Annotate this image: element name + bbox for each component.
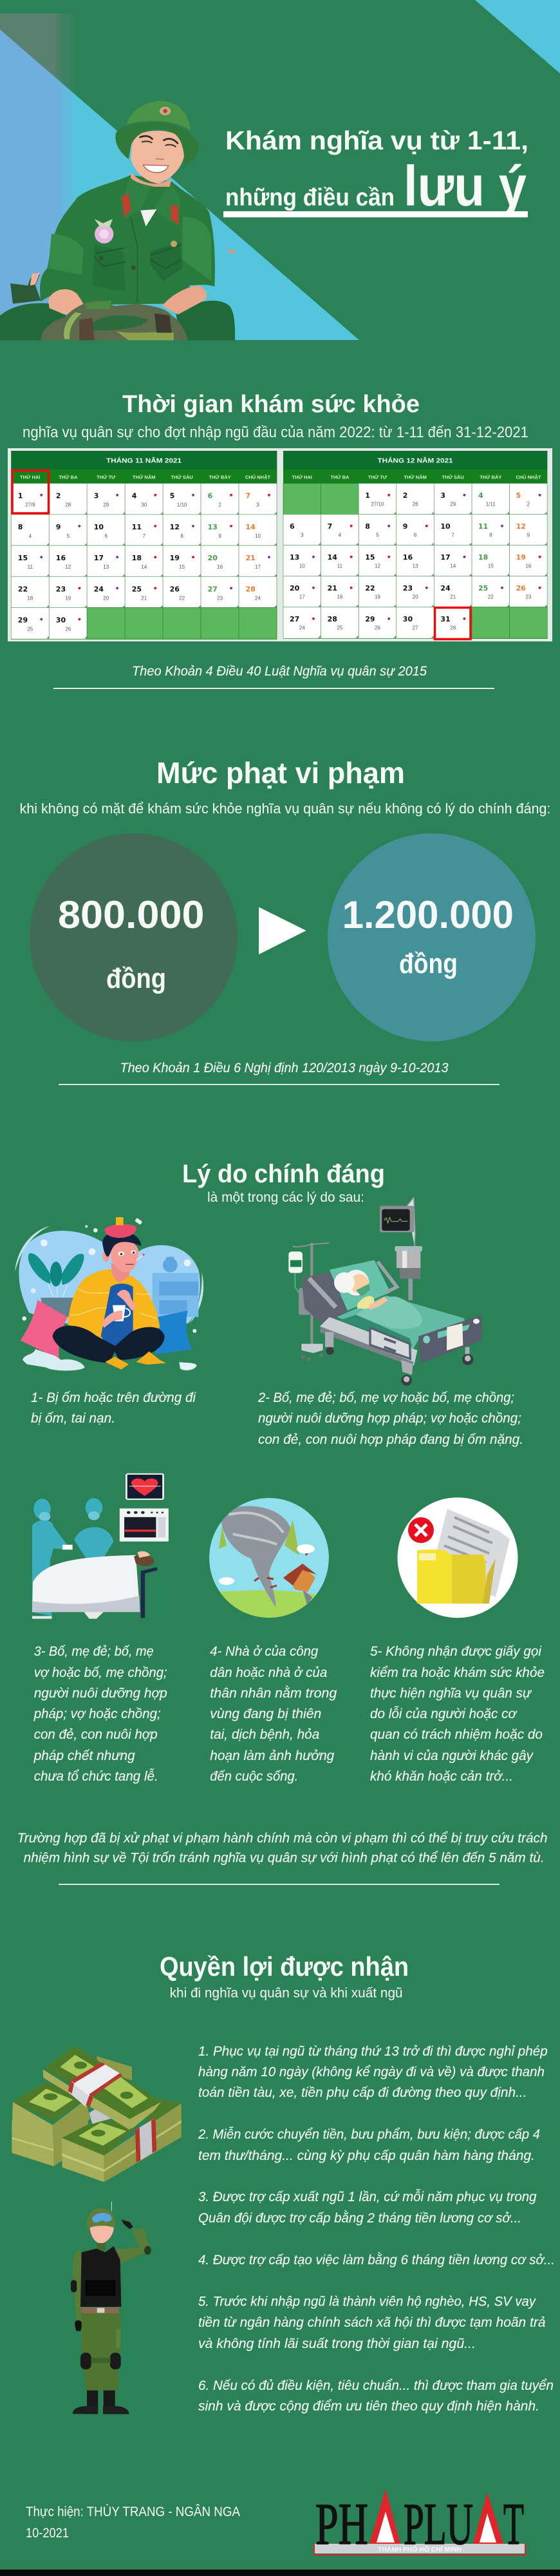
calendar: November 2021: 3	[94, 492, 98, 500]
benefit 1 text: toán tiền tàu, xe, tiền phụ cấp đi đường theo quy định...	[198, 2085, 527, 2100]
reason 4 text	[210, 1644, 337, 1784]
calendar: November 2021: 27/9	[25, 502, 35, 508]
calendar: December 2021: 2	[403, 491, 407, 500]
reason 1 text: bị ốm, tai nạn.	[31, 1411, 115, 1426]
calendar: December 2021: 5	[376, 533, 379, 538]
calendar: December 2021: 21	[328, 584, 337, 592]
calendar: November 2021: 24	[94, 585, 104, 593]
benefit 1 text: hàng năm 10 ngày (không kể ngày đi và về) và được thanh	[198, 2065, 545, 2079]
calendar: November 2021: 22	[179, 595, 185, 601]
calendar: December 2021: 22	[365, 584, 375, 592]
title: lưu ý	[404, 154, 527, 218]
calendar: December 2021: THỨ HAI	[292, 474, 312, 480]
heading: valid reasons: Lý do chính đáng	[182, 1160, 385, 1188]
calendar: December 2021: THÁNG 12 NĂM 2021	[377, 457, 453, 465]
calendar: December 2021: 26	[516, 584, 526, 592]
reason 2 text	[257, 1390, 523, 1447]
calendar: November 2021: 15	[179, 564, 185, 570]
calendar: December 2021: 6	[290, 522, 295, 531]
calendar: November 2021: 5	[67, 533, 70, 539]
calendar: November 2021: 3	[256, 502, 259, 508]
calendar: November 2021: 24	[255, 595, 261, 601]
illustration: saluting soldier	[71, 2201, 151, 2414]
calendar: December 2021: CHỦ NHẬT	[516, 474, 541, 480]
calendar: December 2021: 14	[450, 564, 456, 569]
calendar: November 2021: 18	[132, 554, 142, 562]
calendar: December 2021: 27	[413, 625, 418, 631]
calendar frame	[8, 448, 552, 641]
calendar: November 2021: 16	[56, 554, 66, 562]
reason 3 text: pháp chết nhưng	[33, 1748, 135, 1763]
calendar: December 2021: 16	[525, 564, 532, 569]
heading: penalty: Mức phạt vi phạm	[156, 756, 405, 790]
calendar: November 2021: 17	[255, 564, 261, 570]
reason 4 text: tai, dịch bệnh, hỏa	[210, 1727, 319, 1742]
calendar: December 2021: 10	[440, 522, 451, 531]
logo: Pháp Luật: PH	[315, 2491, 368, 2557]
calendar: December 2021: 30	[403, 615, 413, 623]
reason 5 text: kiểm tra hoặc khám sức khỏe	[370, 1665, 545, 1680]
calendar: November 2021: 29	[18, 616, 28, 625]
calendar: December 2021: 26	[375, 625, 380, 631]
subheading: valid reasons: là một trong các lý do sau:	[207, 1190, 364, 1205]
calendar: November 2021: 21	[246, 554, 256, 562]
calendar: November 2021: 21	[141, 595, 147, 601]
calendar: November 2021: 5	[170, 492, 174, 500]
calendar: December 2021: 23	[525, 594, 532, 600]
reason 3 text: chưa tổ chức tang lễ.	[34, 1769, 158, 1784]
calendar: November 2021: 29	[103, 502, 109, 508]
calendar: November 2021: 11	[132, 523, 142, 531]
title: Khám nghĩa vụ từ 1-11,	[225, 126, 528, 155]
reason 5 text: do lỗi của người hoặc cơ	[370, 1707, 518, 1721]
reason 4 text: hoạn làm ảnh hưởng	[210, 1748, 335, 1763]
benefit 1 text	[198, 2044, 548, 2100]
calendar: December 2021: 3	[301, 533, 304, 538]
subheading: examination dates: nghĩa vụ quân sự cho đợt nhập ngũ đầu của năm 2022: từ 1-11 đến 31-12-2021	[23, 424, 528, 441]
calendar: November 2021: 9	[56, 523, 61, 531]
header decorative triangles	[0, 0, 560, 340]
calendar: December 2021: THỨ NĂM	[404, 474, 427, 480]
illustration: rejected documents folder	[398, 1497, 518, 1618]
calendar: December 2021: 24	[440, 584, 451, 592]
reason 5 text: hành vi của người khác gây	[370, 1748, 534, 1763]
circle: new fine	[328, 833, 536, 1041]
calendar: November 2021: 30	[56, 616, 66, 625]
logo: Pháp Luật: PLU	[404, 2491, 473, 2557]
calendar: December 2021: 19	[375, 594, 380, 600]
benefit 3 text: Quân đội được trợ cấp bằng 2 tháng tiền lương cơ sở...	[198, 2211, 521, 2226]
calendar: December 2021: THỨ BA	[330, 474, 350, 480]
calendar: November 2021: THỨ HAI	[20, 474, 40, 480]
calendar: December 2021: 17	[440, 553, 451, 562]
calendar: December 2021: 19	[516, 553, 526, 562]
calendar: December 2021: 9	[403, 522, 407, 531]
calendar: December 2021: 11	[478, 522, 488, 531]
calendar: November 2021: THỨ BẢY	[209, 474, 231, 480]
heading: examination time: Thời gian khám sức khỏe	[122, 391, 420, 418]
reason 1 text	[31, 1390, 196, 1426]
calendar: December 2021: 13	[290, 553, 299, 562]
reason 4 text: thân nhân nằm trong	[210, 1686, 337, 1701]
reason 2 text: người nuôi dưỡng hợp pháp; vợ hoặc chồng;	[258, 1411, 521, 1426]
calendar: November 2021: 16	[217, 564, 223, 570]
criminal liability note: nhiệm hình sự về Tội trốn tránh nghĩa vụ quân sự với hình phạt có thể lên đến 5 năm tù.	[24, 1851, 545, 1865]
calendar: November 2021: 10	[255, 533, 261, 539]
circle: old fine: 800.000	[58, 893, 205, 936]
reason 5 text: 5- Không nhận được giấy gọi	[370, 1644, 542, 1659]
calendar: November 2021: 23	[56, 585, 66, 593]
illustration: surgery team	[32, 1474, 169, 1619]
circle: old fine	[30, 833, 238, 1041]
calendar: December 2021: 15	[365, 553, 375, 562]
calendar: December 2021: 28	[328, 615, 337, 623]
title: những điều cần	[225, 184, 395, 211]
calendar: December 2021: 28	[450, 625, 456, 631]
credits: 10-2021	[26, 2526, 69, 2541]
calendar: November 2021: 14	[246, 523, 256, 531]
reason 4 text: vùng đang bị thiên	[210, 1707, 321, 1721]
calendar: December 2021: 4	[339, 533, 342, 538]
calendar: November 2021: 11	[28, 564, 33, 570]
benefit 2 text	[198, 2127, 540, 2163]
calendar: December 2021: 20	[290, 584, 300, 592]
benefit 4 text: 4. Được trợ cấp tạo việc làm bằng 6 tháng tiền lương cơ sở...	[198, 2253, 555, 2268]
reason 3 text: vợ hoặc bố, mẹ chồng;	[34, 1665, 167, 1680]
calendar: November 2021: 9	[218, 533, 221, 539]
bottom edge band	[0, 2570, 560, 2576]
calendar: November 2021: THÁNG 11 NĂM 2021	[106, 457, 182, 465]
benefit 3 text	[198, 2190, 537, 2226]
title	[223, 126, 528, 218]
benefit 5 text: 5. Trước khi nhập ngũ là thành viên hộ nghèo, HS, SV vay	[198, 2294, 536, 2309]
calendar: December 2021: 15	[488, 564, 494, 569]
highlight: last exam day	[435, 608, 471, 639]
calendar: December 2021: THỨ TƯ	[368, 474, 387, 480]
circle: new fine: đồng	[399, 948, 458, 980]
calendar: November 2021: 7	[246, 492, 250, 500]
illustration: smiling young soldier	[0, 101, 236, 340]
subheading: benefits: khi đi nghĩa vụ quân sự và khi xuất ngũ	[170, 1986, 403, 2001]
calendar: December 2021: 28	[413, 502, 418, 507]
calendar: November 2021: 1/10	[177, 502, 187, 508]
logo: Pháp Luật: THÀNH PHỐ HỒ CHÍ MINH	[378, 2544, 462, 2553]
calendar: November 2021: 12	[65, 564, 71, 570]
reason 2 text: 2- Bố, mẹ đẻ; bố, mẹ vợ hoặc bố, mẹ chồng;	[257, 1390, 514, 1405]
calendar: November 2021: 17	[94, 554, 104, 562]
illustration: sick man under a blanket	[15, 1217, 203, 1370]
calendar: December 2021: 6	[414, 533, 417, 538]
calendar: December 2021: 4	[478, 491, 483, 500]
calendar: December 2021: THỨ SÁU	[442, 474, 464, 480]
calendar: December 2021: THỨ BẢY	[480, 474, 501, 480]
calendar: December 2021: 20	[413, 594, 418, 600]
benefit 5 text: và không tính lãi suất trong thời gian tại ngũ...	[198, 2336, 476, 2351]
calendar: November 2021: 4	[132, 492, 137, 500]
calendar: December 2021: 25	[337, 625, 343, 631]
logo: Pháp Luật	[314, 2489, 525, 2557]
reason 3 text: pháp; vợ hoặc chồng;	[33, 1707, 161, 1721]
calendar: December 2021: 1	[365, 491, 370, 500]
reason 5 text: thực hiện nghĩa vụ quân sự	[370, 1686, 532, 1701]
calendar: November 2021: 25	[27, 626, 33, 632]
calendar: November 2021: 26	[170, 585, 180, 593]
calendar: December 2021: 29	[450, 502, 456, 507]
criminal liability note	[17, 1831, 548, 1865]
benefit 6 text	[198, 2378, 554, 2414]
reason 3 text	[33, 1644, 167, 1784]
calendar: November 2021: 2	[218, 502, 221, 508]
calendar: December 2021: 5	[516, 491, 521, 500]
reason 5 text: quan có trách nhiệm hoặc do	[370, 1727, 543, 1742]
calendar: November 2021: 15	[18, 554, 28, 562]
credits: Thực hiện: THÙY TRANG - NGÂN NGA	[26, 2505, 240, 2519]
calendar: November 2021: 22	[18, 585, 28, 593]
credits	[26, 2505, 240, 2541]
illustration: stacks of money	[12, 2046, 182, 2182]
calendar: November 2021: THỨ TƯ	[97, 474, 116, 480]
calendar: November 2021: 10	[94, 523, 104, 531]
calendar: December 2021: 8	[365, 522, 370, 531]
source note: decree: Theo Khoản 1 Điều 6 Nghị định 120/2013 ngày 9-10-2013	[120, 1061, 449, 1075]
calendar: December 2021: 27	[290, 615, 299, 623]
reason 3 text: con đẻ, con nuôi hợp	[34, 1727, 158, 1742]
calendar: December 2021: 27/10	[371, 502, 384, 507]
calendar: November 2021: 27	[208, 585, 218, 593]
calendar: November 2021: 20	[103, 595, 109, 601]
calendar: November 2021: 8	[18, 523, 23, 531]
calendar: November 2021: 4	[29, 533, 32, 539]
source note: law: Theo Khoản 4 Điều 40 Luật Nghĩa vụ quân sự 2015	[132, 664, 427, 679]
calendar: December 2021: 24	[299, 625, 305, 631]
calendar: December 2021: 29	[365, 615, 375, 623]
calendar: December 2021: 9	[527, 533, 530, 538]
heading: benefits: Quyền lợi được nhận	[160, 1951, 409, 1982]
benefit 1 text: 1. Phục vụ tại ngũ từ tháng thứ 13 trở đi thì được nghỉ phép	[198, 2044, 548, 2059]
calendar: November 2021: THỨ SÁU	[171, 474, 193, 480]
calendar: December 2021: 2	[527, 502, 530, 507]
calendar: December 2021: 17	[299, 594, 305, 600]
calendar: November 2021: 28	[246, 585, 256, 593]
calendar: November 2021: 14	[141, 564, 147, 570]
highlight: first exam day	[12, 470, 49, 513]
calendar: December 2021: 8	[489, 533, 492, 538]
calendar: November 2021: 1	[18, 492, 23, 500]
benefit 6 text: sinh và được cộng điểm ưu tiên theo quy định hiện hành.	[198, 2399, 539, 2414]
logo: Pháp Luật: T	[503, 2491, 524, 2557]
calendar: November 2021: 30	[141, 502, 147, 508]
calendar: November 2021: 6	[104, 533, 107, 539]
benefit 5 text	[198, 2294, 546, 2351]
reason 5 text: khó khăn hoặc cản trở...	[370, 1769, 513, 1784]
calendar: December 2021: 18	[337, 594, 343, 600]
calendar: December 2021: 23	[403, 584, 413, 592]
calendar: November 2021: 13	[208, 523, 218, 531]
reason 3 text: 3- Bố, mẹ đẻ; bố, mẹ	[34, 1644, 154, 1659]
benefit 5 text: tiền từ ngân hàng chính sách xã hội thì được tạm hoãn trả	[198, 2315, 546, 2330]
calendar: November 2021: 28	[65, 502, 71, 508]
circle: new fine: 1.200.000	[342, 893, 514, 936]
calendar: December 2021: 1/11	[486, 502, 496, 507]
calendar: December 2021: 22	[488, 594, 494, 600]
reason 4 text: dân hoặc nhà ở của	[210, 1665, 327, 1680]
calendar: November 2021: THỨ NĂM	[133, 474, 155, 480]
illustration: tornado hitting a house	[209, 1498, 329, 1623]
subheading: penalty condition: khi không có mặt để khám sức khỏe nghĩa vụ quân sự nếu không có lý do chính đáng:	[19, 800, 551, 817]
calendar: November 2021: 19	[65, 595, 71, 601]
benefit 3 text: 3. Được trợ cấp xuất ngũ 1 lần, cứ mỗi năm phục vụ trong	[198, 2190, 537, 2204]
benefit 2 text: tem thư/tháng... cùng kỳ phụ cấp quân hàm hàng tháng.	[198, 2148, 535, 2163]
calendar: December 2021	[283, 451, 547, 639]
reason 1 text: 1- Bị ốm hoặc trên đường đi	[31, 1390, 196, 1405]
calendar: December 2021: 3	[440, 491, 445, 500]
reason 5 text	[370, 1644, 545, 1784]
calendar: November 2021: THỨ BA	[59, 474, 78, 480]
calendar: December 2021: 11	[337, 564, 343, 569]
calendar: November 2021: 8	[180, 533, 183, 539]
calendar: December 2021: 21	[450, 594, 456, 600]
calendar: December 2021: 12	[375, 564, 380, 569]
benefit 6 text: 6. Nếu có đủ điều kiện, tiêu chuẩn... thì được tham gia tuyển	[198, 2378, 554, 2393]
calendar: December 2021: 25	[478, 584, 488, 592]
reason 4 text: đến cuộc sống.	[210, 1769, 298, 1784]
calendar: November 2021: 13	[103, 564, 109, 570]
calendar: November 2021: 18	[27, 595, 33, 601]
calendar: December 2021: 14	[328, 553, 337, 562]
reason 2 text: con đẻ, con nuôi hợp pháp đang bị ốm nặng.	[258, 1432, 523, 1447]
calendar: December 2021: 13	[413, 564, 418, 569]
criminal liability note: Trường hợp đã bị xử phạt vi phạm hành chính mà còn vi phạm thì có thể bị truy cứu trách	[17, 1831, 548, 1846]
benefit 2 text: 2. Miễn cước chuyển tiền, bưu phẩm, bưu kiện; được cấp 4	[198, 2127, 540, 2142]
calendar: November 2021: 23	[217, 595, 223, 601]
illustration: patient in hospital bed	[288, 1198, 481, 1386]
calendar: December 2021: 16	[403, 553, 413, 562]
circle: old fine: đồng	[106, 963, 166, 994]
calendar: December 2021: 7	[328, 522, 332, 531]
calendar: November 2021: 7	[142, 533, 145, 539]
calendar: November 2021: 19	[170, 554, 180, 562]
calendar: November 2021	[11, 451, 277, 639]
arrow	[259, 907, 306, 954]
calendar: November 2021: 25	[132, 585, 142, 593]
reason 3 text: người nuôi dưỡng hợp	[34, 1686, 167, 1701]
calendar: December 2021: 7	[451, 533, 454, 538]
calendar: November 2021: 12	[170, 523, 180, 531]
calendar: November 2021: 20	[208, 554, 218, 562]
calendar: December 2021: 31	[440, 615, 451, 623]
calendar: December 2021: 18	[478, 553, 488, 562]
calendar: November 2021: 2	[56, 492, 61, 500]
calendar: November 2021: 26	[65, 626, 71, 632]
calendar: November 2021: CHỦ NHẬT	[245, 474, 270, 480]
calendar: November 2021: 6	[208, 492, 213, 500]
calendar: December 2021: 12	[516, 522, 526, 531]
reason 4 text: 4- Nhà ở của công	[210, 1644, 319, 1659]
calendar: December 2021: 10	[299, 564, 305, 569]
